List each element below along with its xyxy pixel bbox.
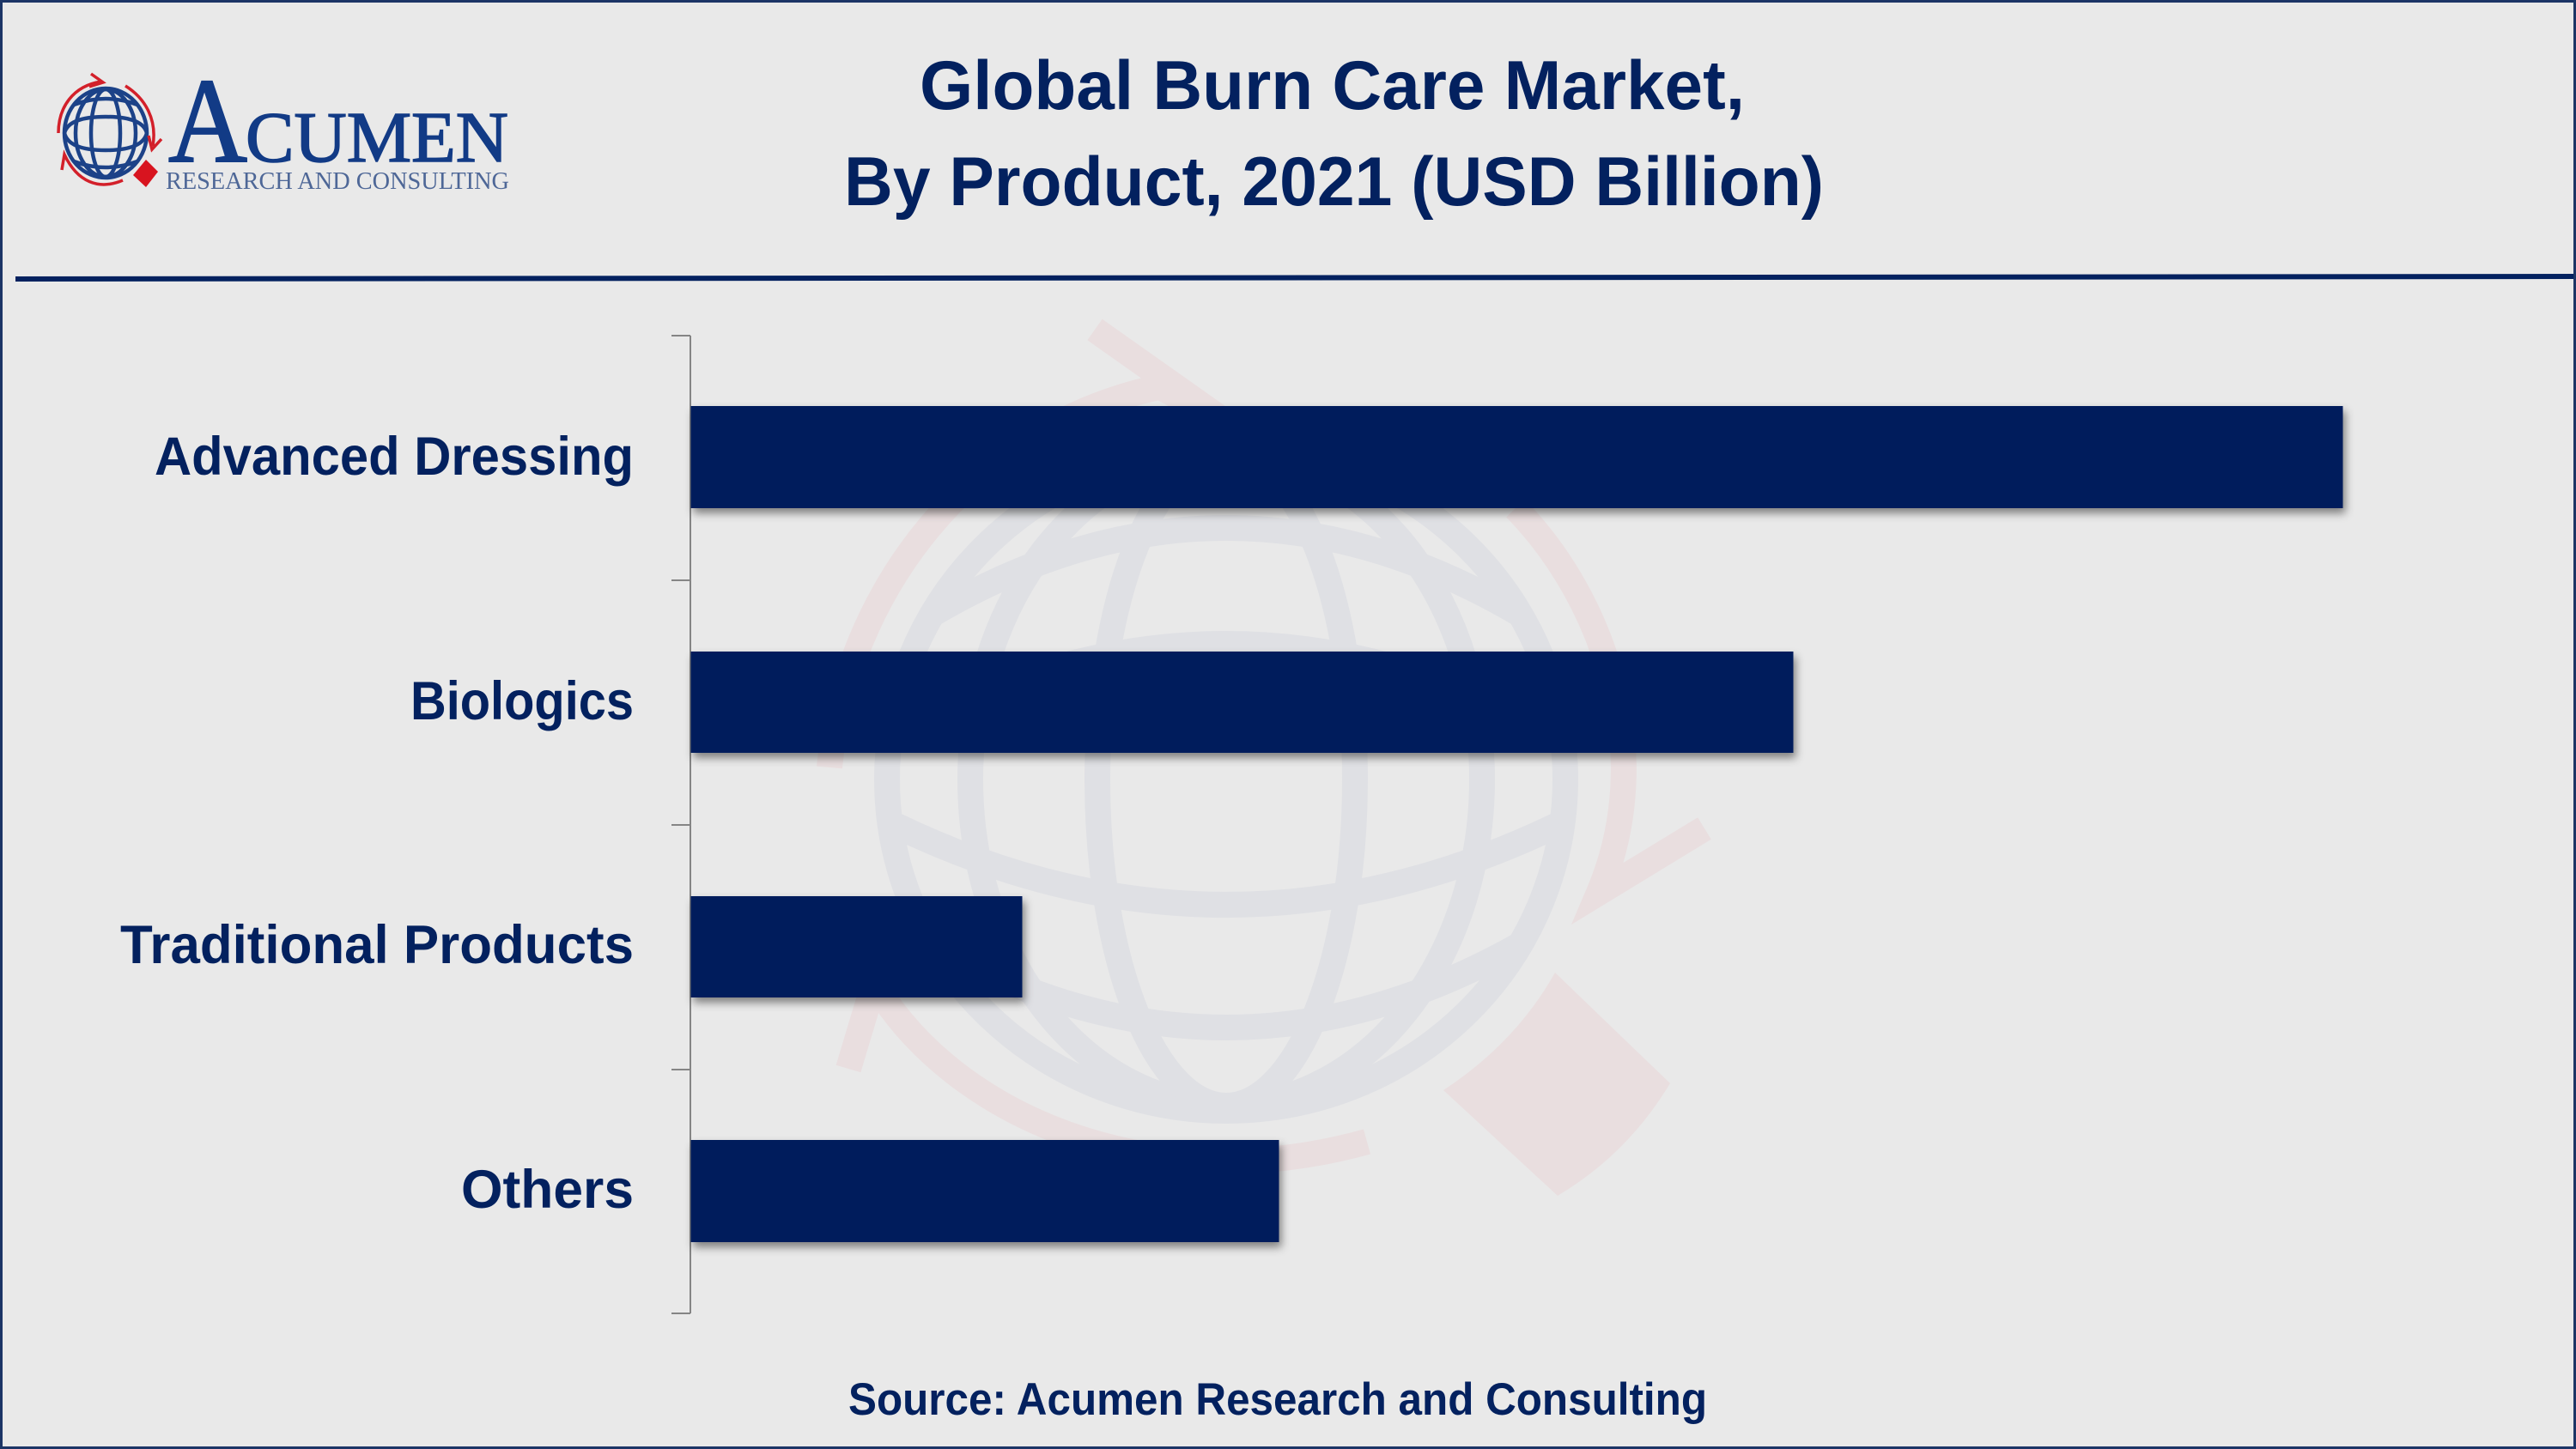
- category labels: Biologics: [410, 671, 634, 731]
- logo: CUMEN: [246, 98, 508, 178]
- logo wordmark: A: [168, 54, 247, 188]
- title: By Product, 2021 (USD Billion): [844, 143, 1824, 221]
- logo icon: red diamond: [133, 160, 158, 187]
- category labels: Advanced Dressing: [155, 427, 634, 487]
- bar: Biologics: [690, 652, 1793, 753]
- logo: [58, 54, 509, 195]
- category labels: Traditional Products: [120, 915, 634, 975]
- logo tagline: RESEARCH AND CONSULTING: [166, 168, 509, 195]
- header divider: [15, 274, 2576, 282]
- bar: Traditional Products: [690, 896, 1022, 997]
- watermark: red diamond: [1443, 973, 1670, 1196]
- logo icon: red arrows: [58, 74, 161, 185]
- title: [844, 47, 1824, 221]
- title: Global Burn Care Market,: [920, 47, 1745, 124]
- bar chart: [690, 406, 2342, 1242]
- source note: Source: Acumen Research and Consulting: [848, 1374, 1707, 1425]
- category labels: Others: [461, 1160, 634, 1220]
- category labels: [120, 427, 634, 1220]
- bar: Others: [690, 1140, 1279, 1242]
- watermark: red arrows: [829, 330, 1704, 1161]
- logo icon: globe: [64, 88, 147, 178]
- axis: [671, 336, 690, 1313]
- watermark: globe lines: [887, 448, 1565, 1111]
- watermark: globe logo: [829, 330, 1704, 1196]
- bar: Advanced Dressing: [690, 406, 2342, 508]
